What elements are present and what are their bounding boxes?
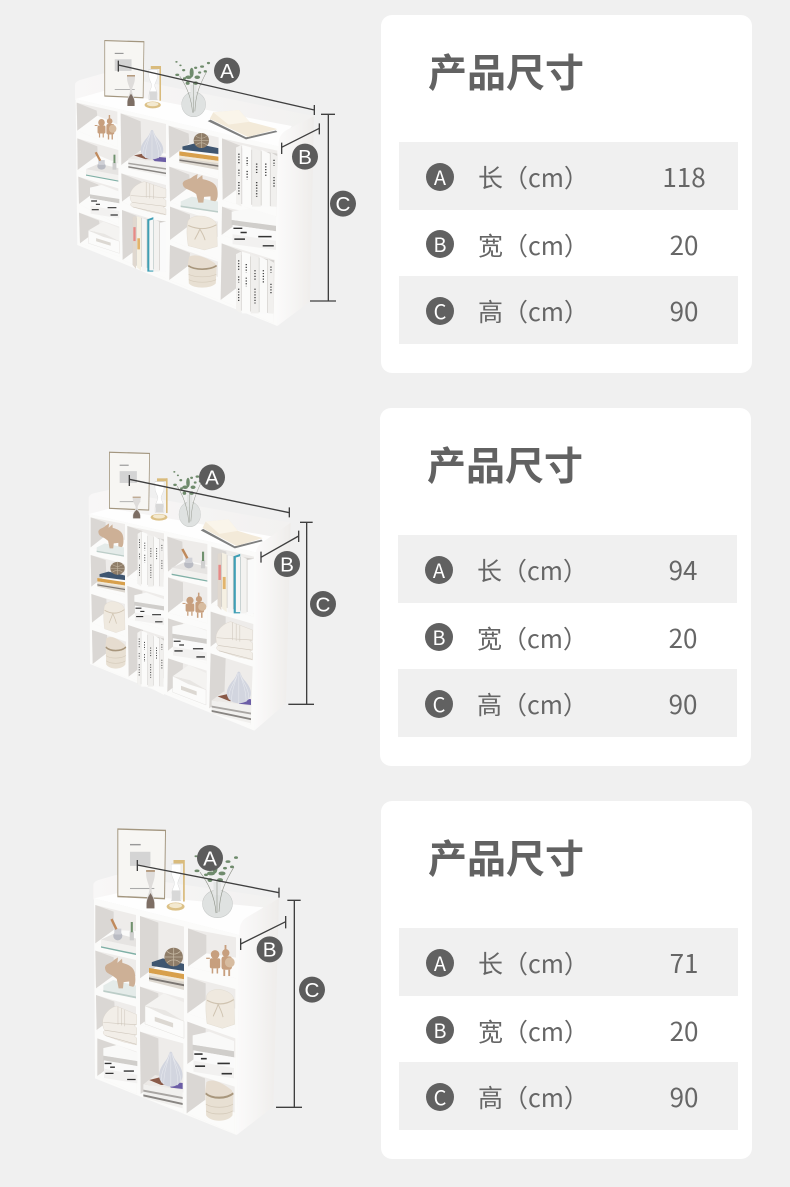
compartments [77,103,277,323]
row: width: B [433,229,447,258]
marker B [257,936,283,962]
row: length [399,142,738,210]
row: width [426,1012,698,1049]
row: width: 20 [670,226,698,263]
marker C [330,191,356,217]
shelf decor [86,115,277,313]
marker C: C [305,979,320,1002]
marker A [214,58,240,84]
compartment floors [95,930,236,1133]
row: height: 高（cm） [478,293,589,329]
row: width: B [432,622,446,651]
heading: 产品尺寸 [428,43,584,99]
marker B: B [263,939,277,962]
panel: size table 1 [381,15,752,373]
heading: 产品尺寸 [427,436,583,492]
compartment side walls [95,905,206,1113]
row: length: 长（cm） [477,552,588,588]
row: height [399,1062,738,1130]
row: length: 长（cm） [478,159,589,195]
row: width: 宽（cm） [478,227,589,263]
row: length: 长（cm） [478,945,589,981]
compartment side walls [91,517,226,708]
row: width: B [433,1015,447,1044]
row: length: 118 [662,158,706,195]
panel: size table 2 [380,408,751,766]
marker A: A [220,60,234,83]
row: width: 20 [670,1012,698,1049]
shelf decor [97,523,254,723]
front face [94,898,239,1135]
marker A: A [203,847,217,870]
top decor [104,40,277,139]
dimension lines [137,860,302,1107]
side panel [254,523,291,731]
marker A: A [205,467,219,490]
marker C [310,591,336,617]
row: height: 90 [670,292,698,329]
marker C: C [316,593,331,616]
compartment floors [91,536,253,725]
marker C [299,977,325,1003]
row: width: 宽（cm） [478,1013,589,1049]
top surface [89,508,273,553]
row: height [399,276,738,344]
row: height: 高（cm） [477,686,588,722]
row: width: 宽（cm） [477,620,588,656]
marker A [199,464,225,490]
top decor [117,828,238,918]
row: height: 90 [670,1078,698,1115]
front face [89,514,257,731]
row: width [426,226,698,263]
compartment side walls [77,103,243,300]
back rail [75,73,314,132]
dimension lines [118,61,336,301]
front face [76,99,280,326]
marker B [292,144,318,170]
row: length: 94 [669,551,697,588]
back rail [89,490,291,540]
row: width: 20 [669,619,697,656]
row: height [398,669,737,737]
row: height: 高（cm） [478,1079,589,1115]
bookshelf 1 (118 cm) [75,40,356,326]
compartments [95,905,236,1133]
row: length: A [434,162,446,191]
row: length: 71 [670,944,698,981]
row: height: C [433,689,445,718]
row: length: A [434,948,446,977]
row: length [398,535,737,603]
compartment floors [77,116,277,323]
row: length: A [433,555,445,584]
row: height: 90 [669,685,697,722]
top surface [76,91,292,147]
row: height: C [434,296,446,325]
panel: size table 3 [381,801,752,1159]
row: height: C [434,1082,446,1111]
row: length [399,928,738,996]
row: width [425,619,697,656]
top decor [109,452,263,548]
bookshelf 3 (71 cm) [93,828,325,1135]
back rail [93,875,279,917]
side panel [277,116,314,326]
marker B: B [280,553,294,576]
heading: 产品尺寸 [428,829,584,885]
marker A [197,845,223,871]
top surface [94,893,263,935]
marker C: C [336,193,351,216]
dimension lines [129,475,314,704]
marker B: B [298,146,312,169]
marker B [274,551,300,577]
shelf decor [101,919,235,1121]
compartments [91,517,254,725]
side panel [237,898,279,1135]
bookshelf 2 (94 cm) [89,452,336,731]
